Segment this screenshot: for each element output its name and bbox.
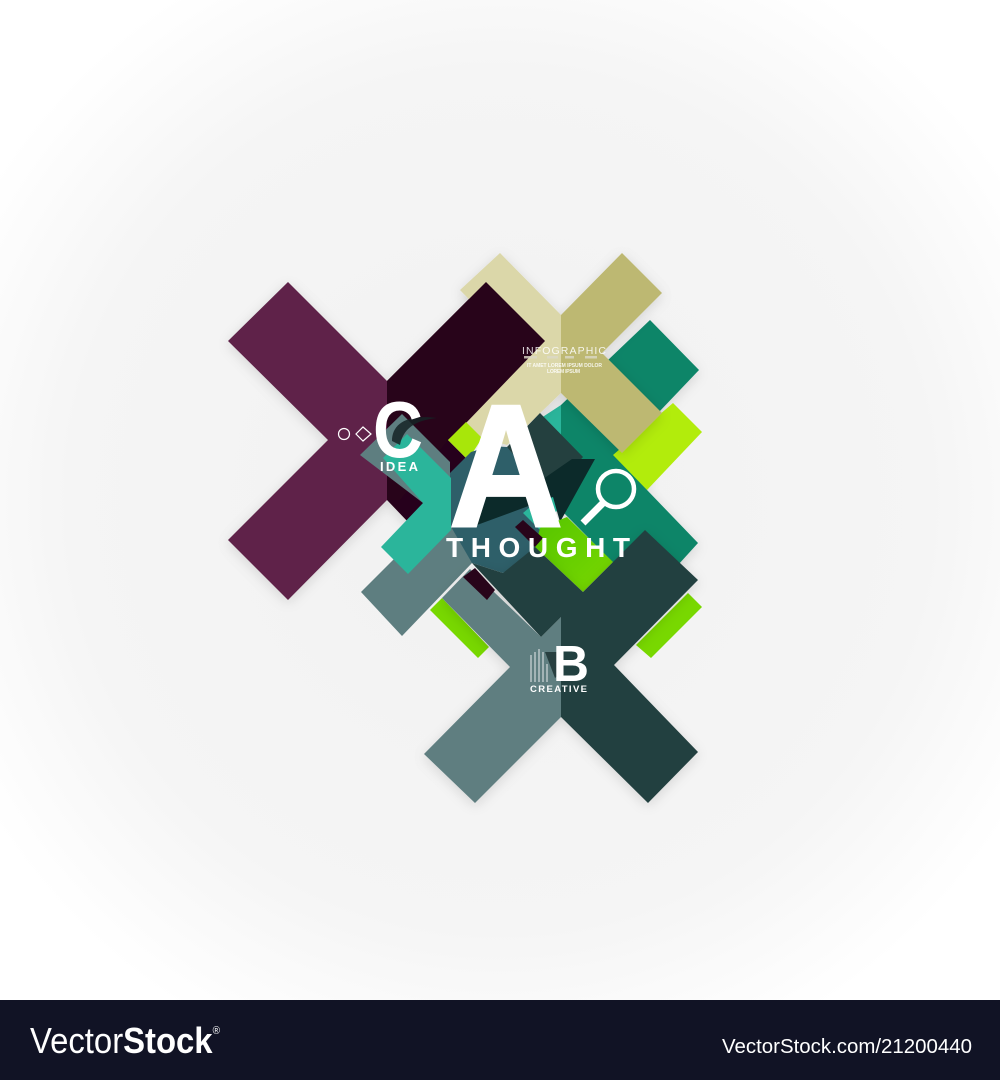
dark angular shadow (477, 459, 595, 525)
grey chevron lower (361, 510, 472, 636)
letter B: B (553, 635, 589, 692)
shadow of letter B (545, 652, 562, 678)
teal sliver (523, 480, 562, 530)
bottom cross (424, 530, 698, 803)
middle green diamond (535, 517, 613, 592)
heading THOUGHT: THOUGHT (446, 532, 630, 563)
small title INFOGRAPHIC: INFOGRAPHIC (522, 345, 606, 357)
small bars under title (524, 356, 597, 358)
teal green cross (510, 320, 699, 598)
letter C: C (373, 385, 423, 474)
dark diamond behind A (507, 413, 583, 495)
footer bar (0, 1000, 1000, 1080)
icon: circle and diamond (338, 427, 371, 441)
small dark purple bars (463, 520, 543, 600)
label IDEA: IDEA (380, 459, 419, 474)
icon: vertical bars (531, 649, 547, 682)
footer url: VectorStock.com/21200440 (722, 1036, 972, 1058)
dark teal diamond (450, 446, 560, 573)
shadow of letter C (392, 417, 437, 445)
upper lime green piece (613, 403, 702, 490)
label CREATIVE: CREATIVE (530, 684, 587, 695)
letter A: A (449, 368, 563, 563)
footer logo: ® (213, 1025, 220, 1037)
grey chevron upper (360, 414, 450, 503)
small body text (527, 363, 602, 375)
purple arm over olive (387, 282, 545, 500)
olive cross (460, 253, 662, 453)
small body text: LOREM IPSUM (547, 369, 580, 375)
teal chevron (381, 434, 451, 574)
icon: magnifier (583, 471, 634, 523)
left lime green piece (448, 422, 482, 460)
purple cross (228, 282, 545, 600)
footer logo: VectorStock (30, 1020, 221, 1061)
small body text: IT AMET LOREM IPSUM DOLOR (527, 363, 602, 369)
lower lime green pieces (430, 593, 702, 658)
